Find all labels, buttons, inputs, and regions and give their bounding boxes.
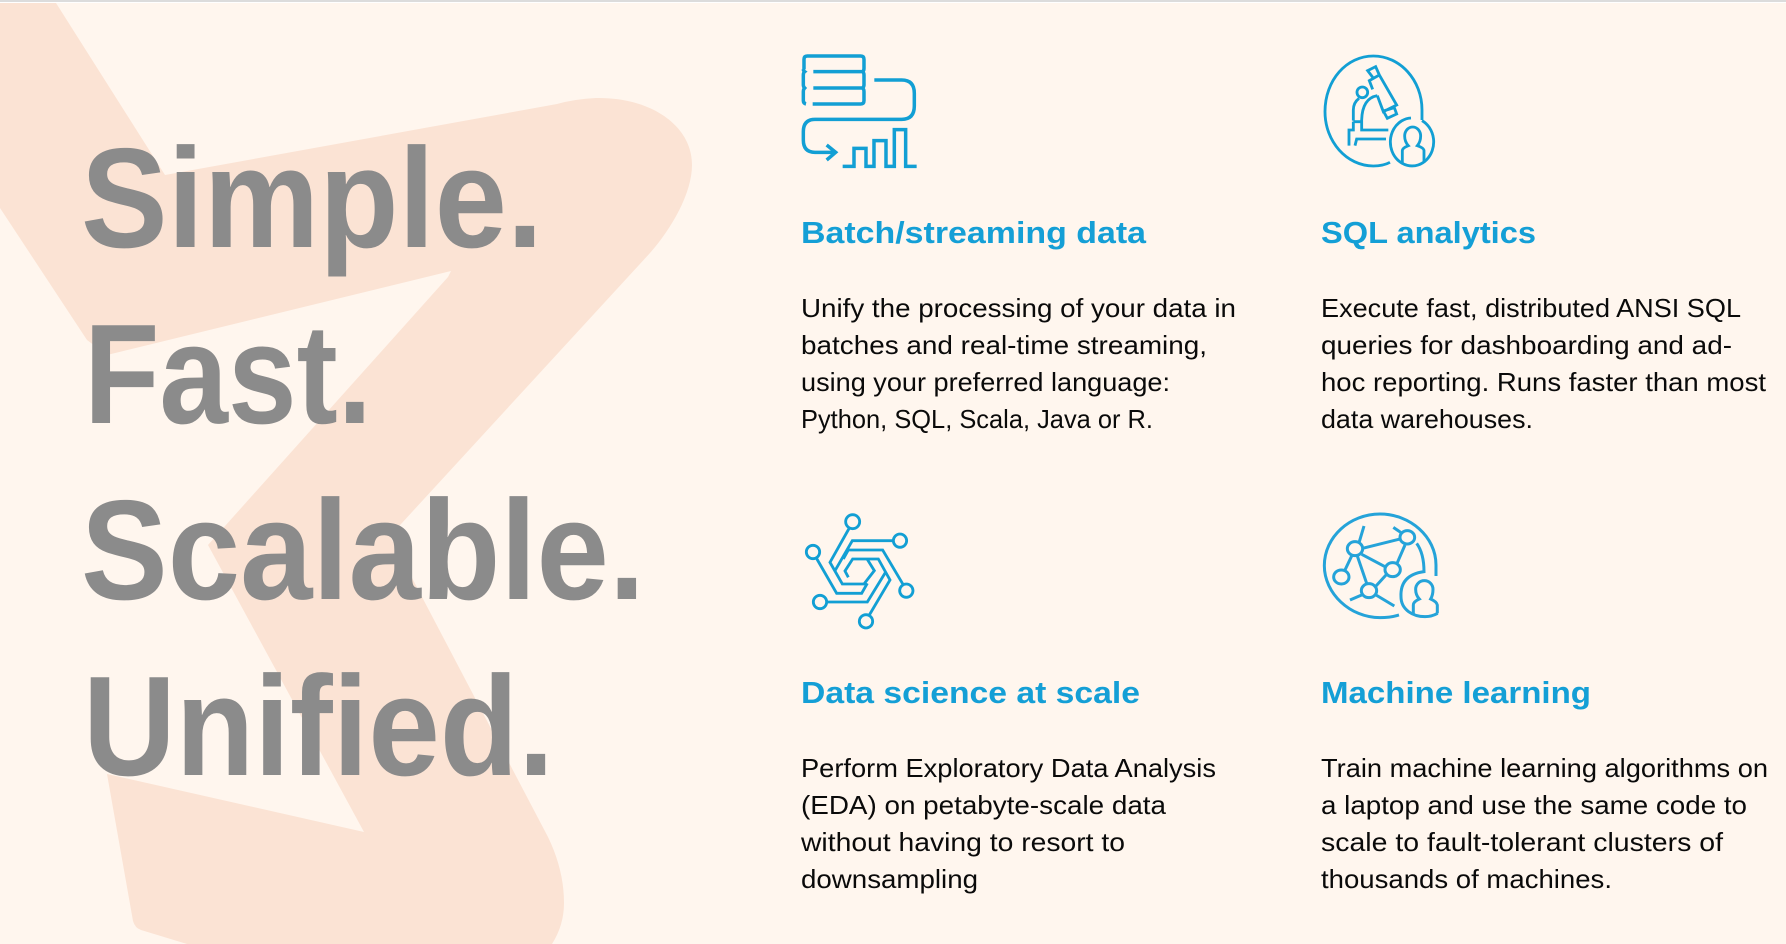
panel: machine learning — [1321, 514, 1768, 894]
body text — [801, 293, 1236, 434]
headline: Scalable. — [81, 471, 645, 630]
body text: scale to fault-tolerant clusters of — [1321, 827, 1724, 857]
body text: Python, SQL, Scala, Java or R. — [801, 404, 1153, 434]
headline — [81, 119, 645, 806]
icon: database to chart — [803, 56, 917, 166]
panel: batch/streaming data — [801, 56, 1236, 434]
icon: network and person — [1324, 514, 1438, 618]
heading: SQL analytics — [1321, 215, 1536, 250]
background arrow shape — [0, 3, 692, 944]
body text: Unify the processing of your data in — [801, 293, 1236, 323]
body text: without having to resort to — [800, 827, 1125, 857]
heading: Machine learning — [1321, 675, 1591, 710]
body text: batches and real-time streaming, — [801, 330, 1207, 360]
body text: downsampling — [801, 864, 978, 894]
icon: circuit hexagon — [806, 515, 913, 628]
body text: using your preferred language: — [801, 367, 1170, 397]
body text: Execute fast, distributed ANSI SQL — [1321, 293, 1741, 323]
icon: microscope and person — [1325, 56, 1434, 166]
body text: (EDA) on petabyte-scale data — [801, 790, 1167, 820]
heading: Batch/streaming data — [801, 215, 1147, 250]
body text — [800, 753, 1216, 894]
panel: data science at scale — [800, 515, 1216, 894]
body text — [1321, 753, 1768, 894]
headline: Fast. — [84, 295, 372, 454]
body text: thousands of machines. — [1321, 864, 1612, 894]
body text: Perform Exploratory Data Analysis — [801, 753, 1216, 783]
body text: queries for dashboarding and ad- — [1321, 330, 1732, 360]
body text — [1321, 293, 1767, 434]
body text: Train machine learning algorithms on — [1321, 753, 1768, 783]
body text: hoc reporting. Runs faster than most — [1321, 367, 1767, 397]
headline: Unified. — [83, 647, 554, 806]
panel: SQL analytics — [1321, 56, 1767, 434]
headline: Simple. — [81, 119, 543, 278]
body text: a laptop and use the same code to — [1321, 790, 1747, 820]
heading: Data science at scale — [801, 675, 1140, 710]
body text: data warehouses. — [1321, 404, 1533, 434]
